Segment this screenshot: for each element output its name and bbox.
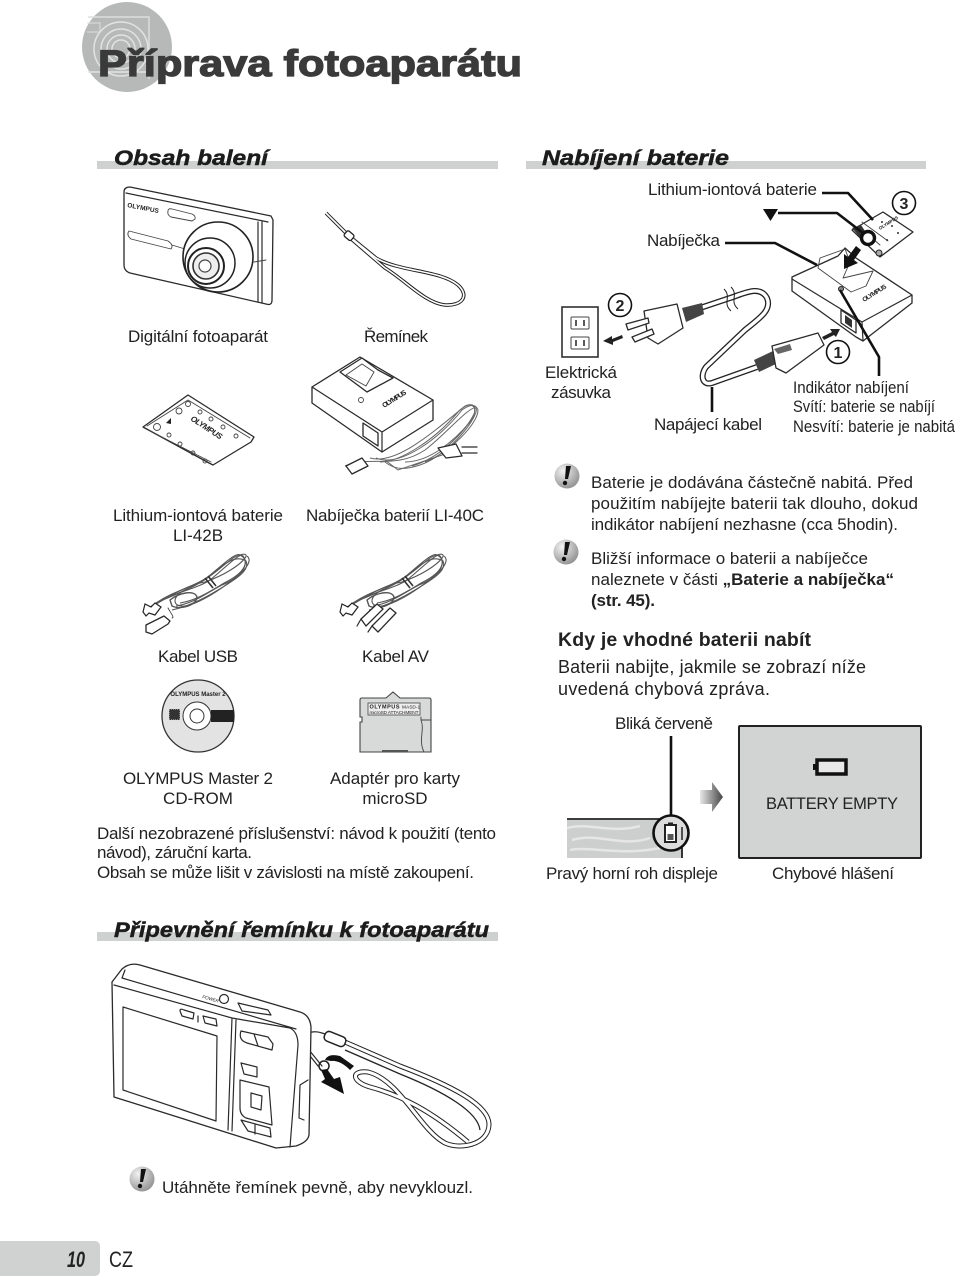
label: CD-ROM xyxy=(123,769,273,808)
text block: other accessories: návod), záruční karta. xyxy=(97,843,252,862)
text block: note 2: naleznete v části „Baterie a nabíječka“ xyxy=(591,570,894,589)
label: charger: Nabíječka xyxy=(647,231,721,250)
arrow: cord into charger xyxy=(822,329,840,340)
icon: microSD adapter: OLYMPUS xyxy=(370,704,400,710)
label: outlet: Elektrická xyxy=(545,363,618,382)
language code: CZ xyxy=(109,1247,133,1272)
panel: error message xyxy=(739,726,921,858)
label: battery: Lithium-iontová baterie xyxy=(113,506,283,525)
text block: note 1: použitím nabíjejte baterii tak dlouho, dokud xyxy=(591,494,918,513)
arrow: tighten strap xyxy=(321,1055,354,1094)
title icon: grey circle with camera xyxy=(82,2,172,92)
icon: step 2 xyxy=(608,294,632,316)
arrow: battery into charger xyxy=(844,246,861,269)
icon: charger with cord: OLYMPUS xyxy=(381,389,408,410)
icon: note 2 xyxy=(554,540,578,564)
icon: empty battery xyxy=(813,760,846,774)
icon: power cord xyxy=(626,287,824,384)
heading: attach strap: Připevnění řemínku k fotoaparátu xyxy=(114,918,489,942)
label: adapter: Adaptér pro karty xyxy=(330,769,460,788)
text block: when to charge xyxy=(558,657,866,699)
label: display corner: Pravý horní roh displeje xyxy=(546,864,718,883)
icon: wrist strap xyxy=(326,213,464,305)
label: CD-ROM: OLYMPUS Master 2 xyxy=(123,769,273,788)
icon: step 2: 2 xyxy=(616,298,625,315)
icon: step 1 xyxy=(826,340,850,364)
icon: strap loop xyxy=(301,1030,489,1146)
text block: note 2: (str. 45). xyxy=(591,591,655,610)
icon: step 3 xyxy=(892,192,916,214)
icon: triangle mark xyxy=(763,209,778,221)
icon: USB cable xyxy=(143,554,249,634)
label: charger: Nabíječka baterií LI-40C xyxy=(306,506,484,525)
text block: when to charge: uvedená chybová zpráva. xyxy=(558,679,770,699)
icon: step 3: 3 xyxy=(900,196,909,213)
text block: charge indicator: Indikátor nabíjení xyxy=(793,378,909,397)
arrow: leader lines xyxy=(712,193,879,412)
label: adapter xyxy=(330,769,460,808)
text block: note 1 xyxy=(591,473,918,534)
page title: Příprava fotoaparátu xyxy=(98,43,522,84)
icon: wall outlet xyxy=(562,307,598,357)
label: strap: Řemínek xyxy=(364,327,428,346)
icon: battery being inserted: OLYMPUS xyxy=(878,215,899,231)
panel: charging diagram xyxy=(545,180,955,436)
label: power cord: Napájecí kabel xyxy=(654,415,762,434)
icon: lithium-ion battery xyxy=(143,395,254,465)
panel: package contents xyxy=(97,187,496,882)
icon: CD-ROM: OLYMPUS Master 2 xyxy=(170,692,226,698)
icon: note 1 xyxy=(554,464,580,488)
heading: Nabíjení baterie: Nabíjení baterie xyxy=(542,146,729,170)
text block: charge indicator xyxy=(793,378,955,436)
icon: CD-ROM xyxy=(162,680,234,752)
icon: charger xyxy=(792,248,912,341)
message text: BATTERY EMPTY xyxy=(766,795,898,813)
label: outlet xyxy=(545,363,618,402)
label: camera: Digitální fotoaparát xyxy=(128,327,268,346)
label: adapter: microSD xyxy=(362,789,428,808)
page number tab: 10 xyxy=(67,1247,86,1272)
icon: display corner with battery symbol xyxy=(567,736,688,858)
label: blinks red: Bliká červeně xyxy=(615,714,713,733)
label: error message: Chybové hlášení xyxy=(772,864,894,883)
icon: microSD adapter: microSD ATTACHMENT xyxy=(370,710,419,716)
icon: camera back xyxy=(112,964,311,1148)
icon: camera back: POWER xyxy=(202,994,220,1004)
icon: microSD adapter xyxy=(360,692,431,752)
arrow: to error message xyxy=(700,782,723,812)
page number tab xyxy=(0,1241,100,1276)
text block: charge indicator: Svítí: baterie se nabíjí xyxy=(793,397,935,416)
heading: Nabíjení baterie xyxy=(526,146,926,170)
label: battery: LI-42B xyxy=(173,526,223,545)
icon: charger: OLYMPUS xyxy=(861,283,889,304)
heading: Obsah balení: Obsah balení xyxy=(114,146,271,170)
label: battery xyxy=(113,506,283,545)
icon: step 1: 1 xyxy=(834,345,843,362)
panel: charging notes xyxy=(546,464,921,883)
panel: camera back with strap xyxy=(112,964,489,1148)
heading: Obsah balení xyxy=(97,146,498,170)
text block: other accessories xyxy=(97,824,496,882)
text block: other accessories: Obsah se může lišit v závislosti na místě zakoupení. xyxy=(97,863,474,882)
icon: battery being inserted xyxy=(852,212,913,257)
text block: note 2: Bližší informace o baterii a nabíječce xyxy=(591,549,868,568)
icon: lithium-ion battery: OLYMPUS xyxy=(189,414,225,442)
text block: note 2 xyxy=(591,549,894,610)
heading: when to charge: Kdy je vhodné baterii nabít xyxy=(558,629,812,651)
icon: AV cable xyxy=(340,554,446,632)
text block: note 1: Baterie je dodávána částečně nabitá. Před xyxy=(591,473,913,492)
icon: digital camera front: OLYMPUS xyxy=(127,202,160,215)
text block: tighten note: Utáhněte řemínek pevně, aby nevyklouzl. xyxy=(162,1178,473,1197)
label: AV cable: Kabel AV xyxy=(362,647,430,666)
icon: charger with cord xyxy=(312,357,478,474)
icon: note 3 xyxy=(130,1166,154,1192)
text block: other accessories: Další nezobrazené příslušenství: návod k použití (tento xyxy=(97,824,496,843)
label: CD-ROM: CD-ROM xyxy=(163,789,233,808)
text block: note 1: indikátor nabíjení nezhasne (cca 5hodin). xyxy=(591,515,898,534)
icon: microSD adapter: MASD-1 xyxy=(402,704,420,710)
text block: when to charge: Baterii nabijte, jakmile se zobrazí níže xyxy=(558,657,866,677)
label: outlet: zásuvka xyxy=(551,383,612,402)
icon: digital camera front xyxy=(124,187,273,304)
label: USB cable: Kabel USB xyxy=(158,647,238,666)
arrow: plug into outlet xyxy=(603,335,623,345)
label: lithium-ion battery: Lithium-iontová baterie xyxy=(648,180,817,199)
